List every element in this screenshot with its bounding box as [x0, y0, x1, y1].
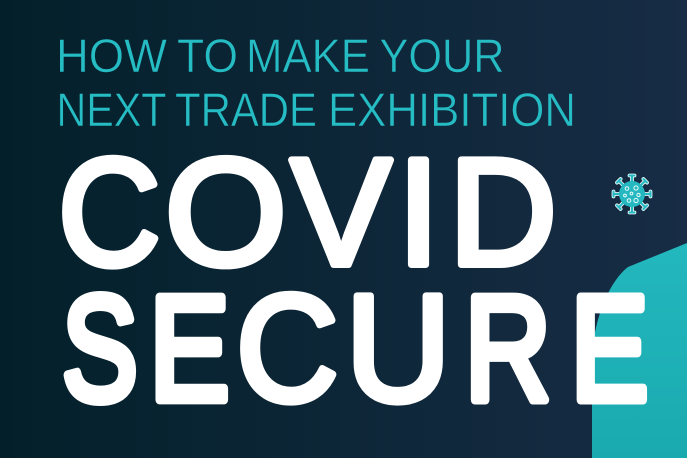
headline word: COVID: V	[291, 128, 391, 298]
headline word: COVID: C	[58, 128, 160, 298]
heading line 1: MAKE	[246, 29, 370, 82]
headline word: COVID	[58, 127, 557, 298]
heading line 1: TO	[177, 29, 238, 82]
headline word: SECURE	[62, 263, 648, 434]
headline word: SECURE: E	[149, 265, 229, 432]
headline word: SECURE: R	[465, 265, 551, 432]
heading line 2: EXHIBITION	[328, 83, 576, 136]
heading line 2	[56, 83, 576, 136]
headline word: SECURE: S	[62, 266, 138, 432]
teal corner shape	[592, 243, 687, 458]
heading line 2: NEXT	[56, 83, 166, 136]
heading line 1: HOW	[56, 29, 168, 82]
headline word: SECURE: C	[236, 264, 338, 434]
icon: coronavirus	[614, 176, 650, 212]
heading line 2: TRADE	[175, 83, 317, 136]
headline word: COVID: I	[397, 128, 440, 298]
headline word: COVID: O	[165, 127, 287, 297]
heading: how to make your next trade exhibition	[56, 29, 576, 136]
headline word: SECURE: E	[571, 266, 648, 432]
heading line 1	[56, 29, 504, 82]
headline word: COVID: D	[449, 127, 557, 297]
headline word: SECURE: U	[346, 263, 451, 433]
heading line 1: YOUR	[380, 29, 504, 82]
